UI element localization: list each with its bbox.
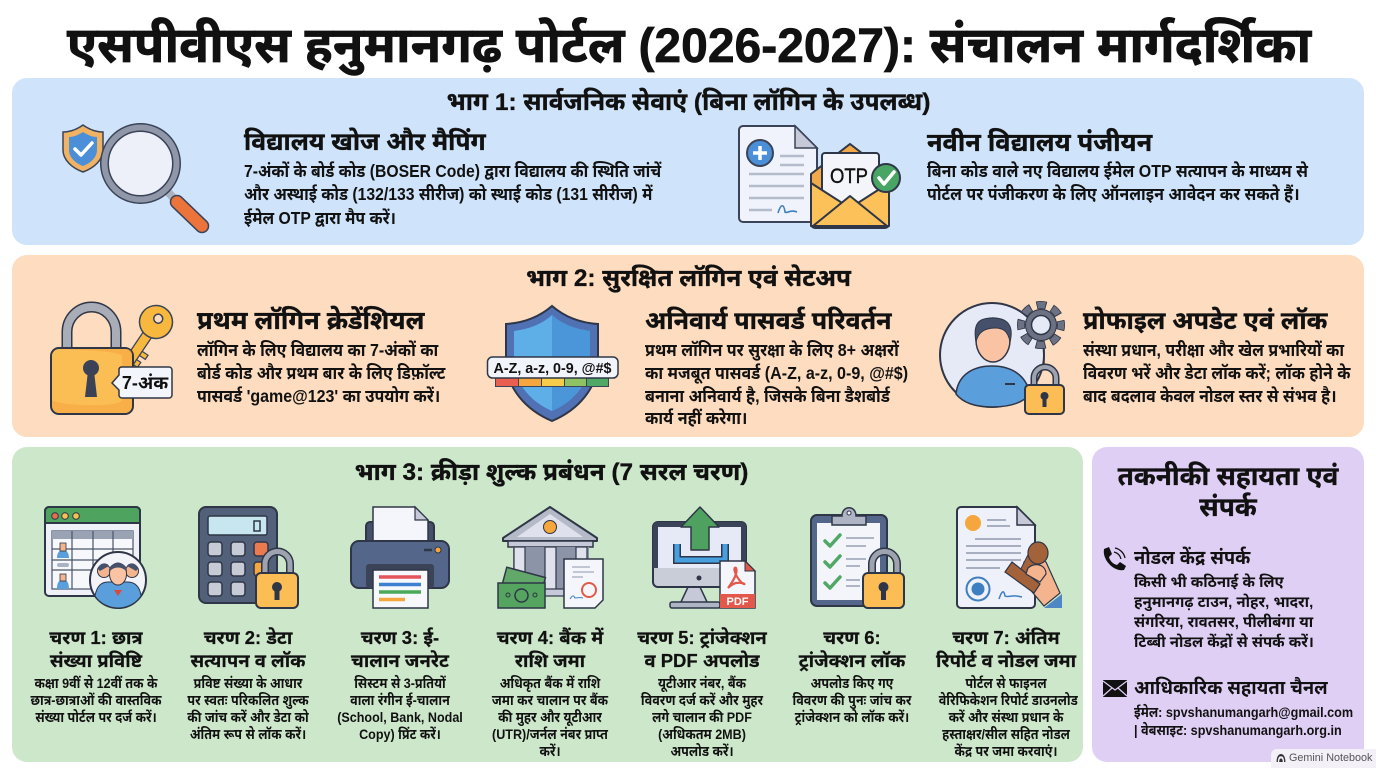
heading: part 1: भाग 1: सार्वजनिक सेवाएं (बिना लॉगिन के उपलब्ध) xyxy=(447,89,930,116)
body text: ईमेल OTP द्वारा मैप करें। xyxy=(244,208,396,228)
icon: step 6 clipboard and lock xyxy=(810,507,905,609)
step description: लगे चालान की PDF xyxy=(652,708,752,724)
subheading: प्रथम लॉगिन क्रेडेंशियल xyxy=(197,307,424,335)
icon: user profile with gear and lock xyxy=(939,301,1065,415)
body text: बनाना अनिवार्य है, जिसके बिना डैशबोर्ड xyxy=(645,386,890,406)
step description: अंतिम रूप से लॉक करें। xyxy=(190,726,306,742)
step title xyxy=(190,627,306,671)
step title: चरण 7: अंतिम xyxy=(952,627,1060,648)
icon: envelope xyxy=(1103,680,1127,697)
step description: वाला रंगीन ई-चालान xyxy=(350,692,450,708)
body text: और अस्थाई कोड (132/133 सीरीज) को स्थाई कोड (131 सीरीज) में xyxy=(244,184,652,204)
text: step 7 xyxy=(931,626,1081,760)
step description xyxy=(939,674,1073,760)
text: official support channel xyxy=(1134,675,1376,739)
step description: करें और संस्था प्रधान के xyxy=(949,708,1063,724)
icon: notebook logo xyxy=(1276,754,1286,762)
text: school search and mapping xyxy=(244,127,662,228)
body text: बिना कोड वाले नए विद्यालय ईमेल OTP सत्यापन के माध्यम से xyxy=(927,161,1308,181)
step title: व PDF अपलोड xyxy=(644,650,760,671)
step description: अपलोड करें। xyxy=(670,742,734,758)
step description xyxy=(640,674,764,758)
icon: step 1 student table xyxy=(44,506,147,609)
text: step 4 xyxy=(492,627,608,758)
step description xyxy=(337,674,463,742)
watermark: Gemini Notebook xyxy=(1271,749,1376,768)
panel: part 2 secure login xyxy=(12,255,1364,437)
step description xyxy=(792,674,912,726)
heading: part 3: भाग 3: क्रीड़ा शुल्क प्रबंधन (7 सरल चरण) xyxy=(355,459,748,486)
step title xyxy=(350,627,450,671)
icon: phone xyxy=(1103,547,1128,571)
step title: चरण 1: छात्र xyxy=(49,627,143,648)
step title xyxy=(798,627,906,672)
step title xyxy=(931,626,1081,672)
icon: step 7 signed document and stamp xyxy=(957,507,1059,608)
heading: support: तकनीकी सहायता एवं xyxy=(1118,461,1338,491)
step description xyxy=(187,674,309,742)
step description: अधिकृत बैंक में राशि xyxy=(500,674,600,690)
icon: step 4 bank, cash and receipt xyxy=(497,506,604,609)
panel: part 1 public services xyxy=(12,78,1364,245)
step description: छात्र-छात्राओं की वास्तविक xyxy=(30,692,162,708)
step title xyxy=(496,627,604,671)
text: step 1 xyxy=(30,627,162,724)
step title: चरण 5: ट्रांजेक्शन xyxy=(637,627,767,648)
text: step 5 xyxy=(637,627,768,758)
body text: कार्य नहीं करेगा। xyxy=(645,408,747,428)
body text xyxy=(1083,340,1351,406)
panel: technical support and contact xyxy=(1092,447,1364,762)
step title xyxy=(49,627,143,671)
text: step 3 xyxy=(337,627,463,742)
heading: support xyxy=(1092,461,1364,523)
body text: लॉगिन के लिए विद्यालय का 7-अंकों का xyxy=(197,340,438,360)
body text: किसी भी कठिनाई के लिए xyxy=(1134,574,1284,591)
body text: संस्था प्रधान, परीक्षा और खेल प्रभारियों का xyxy=(1083,340,1344,360)
step description: पर स्वतः परिकलित शुल्क xyxy=(187,692,309,708)
step description: की मुहर और यूटीआर xyxy=(498,708,602,724)
body text xyxy=(645,340,908,428)
icon: step 5 monitor upload and PDF xyxy=(652,506,756,609)
icon: password shield with strength bar xyxy=(486,304,619,422)
body text: विवरण भरें और डेटा लॉक करें; लॉक होने के xyxy=(1083,363,1350,383)
step title: चरण 2: डेटा xyxy=(204,627,292,648)
step description xyxy=(30,674,162,724)
step description: Copy) प्रिंट करें। xyxy=(359,726,441,742)
title: एसपीवीएस हनुमानगढ़ पोर्टल (2026-2027): संचालन मार्गदर्शिका xyxy=(67,17,1311,73)
panel: part 3 sports fee management xyxy=(12,447,1083,762)
step description: कक्षा 9वीं से 12वीं तक के xyxy=(35,674,157,690)
text: first login credentials xyxy=(196,306,446,406)
body text: बोर्ड कोड और प्रथम बार के लिए डिफ़ॉल्ट xyxy=(197,363,445,383)
step description: विवरण की पुनः जांच कर xyxy=(793,692,911,708)
icon: padlock, key and 7-digit tag xyxy=(50,302,174,415)
step description: प्रविष्ट संख्या के आधार xyxy=(194,674,302,690)
step title: संख्या प्रविष्टि xyxy=(50,650,142,671)
body text: बाद बदलाव केवल नोडल स्तर से संभव है। xyxy=(1083,386,1337,406)
body text xyxy=(197,340,446,406)
step title: चरण 4: बैंक में xyxy=(497,627,603,648)
text: nodal centre contact xyxy=(1134,545,1314,653)
step title: ट्रांजेक्शन लॉक xyxy=(799,650,905,671)
body text: का मजबूत पासवर्ड (A-Z, a-z, 0-9, @#$) xyxy=(645,363,908,383)
body text xyxy=(244,161,662,228)
step description: यूटीआर नंबर, बैंक xyxy=(658,674,746,690)
icon: step 5 monitor upload and PDF: PDF xyxy=(726,596,749,608)
step description: संख्या पोर्टल पर दर्ज करें। xyxy=(35,708,157,724)
body text: प्रथम लॉगिन पर सुरक्षा के लिए 8+ अक्षरों xyxy=(645,340,899,360)
step title: सत्यापन व लॉक xyxy=(190,650,306,671)
body text: | वेबसाइट: spvshanumangarh.org.in xyxy=(1134,722,1342,738)
body text: हनुमानगढ़ टाउन, नोहर, भादरा, xyxy=(1134,594,1313,611)
step description: जमा कर चालान पर बैंक xyxy=(492,692,608,708)
step description: ट्रांजेक्शन को लॉक करें। xyxy=(795,708,909,724)
step title: राशि जमा xyxy=(515,650,585,671)
step title xyxy=(637,627,768,671)
subheading: आधिकारिक सहायता चैनल xyxy=(1134,677,1328,699)
step title: चरण 3: ई- xyxy=(361,627,439,648)
text: step 6 xyxy=(792,627,912,726)
step description: केंद्र पर जमा करवाएं। xyxy=(955,742,1057,758)
icon: step 2 calculator and lock xyxy=(198,506,299,609)
subheading: अनिवार्य पासवर्ड परिवर्तन xyxy=(645,307,892,335)
body text xyxy=(927,161,1308,204)
step description: सिस्टम से 3-प्रतियों xyxy=(354,674,446,690)
body text: ईमेल: spvshanumangarh@gmail.com xyxy=(1134,704,1353,720)
body text xyxy=(1134,573,1314,653)
subheading: प्रोफाइल अपडेट एवं लॉक xyxy=(1083,307,1327,335)
body text: पोर्टल पर पंजीकरण के लिए ऑनलाइन आवेदन कर सकते हैं। xyxy=(927,184,1300,204)
step title: चरण 6: xyxy=(823,627,881,648)
icon: password shield with strength bar: A-Z, a-z, 0-9, @#$ xyxy=(494,360,612,377)
step description: हस्ताक्षर/सील सहित नोडल xyxy=(942,726,1070,742)
text: profile update and lock xyxy=(1082,306,1351,406)
body text: टिब्बी नोडल केंद्रों से संपर्क करें। xyxy=(1134,634,1314,651)
heading: support: संपर्क xyxy=(1199,492,1257,522)
step description: (अधिकतम 2MB) xyxy=(658,726,746,742)
step description: करें। xyxy=(539,742,561,758)
step title: चालान जनरेट xyxy=(351,650,449,671)
body text: 7-अंकों के बोर्ड कोड (BOSER Code) द्वारा विद्यालय की स्थिति जांचें xyxy=(244,161,661,181)
body text xyxy=(1134,703,1353,739)
step description: अपलोड किए गए xyxy=(811,674,893,690)
text: new school registration xyxy=(926,128,1308,204)
subheading: नवीन विद्यालय पंजीयन xyxy=(927,129,1152,157)
icon: padlock, key and 7-digit tag: 7-अंक xyxy=(122,373,169,393)
icon: step 3 printer xyxy=(350,506,450,609)
step description: (UTR)/जर्नल नंबर प्राप्त xyxy=(492,726,608,742)
body text: संगरिया, रावतसर, पीलीबंगा या xyxy=(1134,614,1313,631)
text: step 2 xyxy=(187,627,309,742)
subheading: विद्यालय खोज और मैपिंग xyxy=(244,129,486,156)
step description: (School, Bank, Nodal xyxy=(337,708,463,724)
watermark: Gemini Notebook: Gemini Notebook xyxy=(1289,752,1372,764)
icon: document and OTP envelope: OTP xyxy=(830,165,868,188)
step description: पोर्टल से फाइनल xyxy=(965,674,1047,690)
text: mandatory password change xyxy=(645,306,908,428)
body text: पासवर्ड 'game@123' का उपयोग करें। xyxy=(197,386,440,406)
step title: रिपोर्ट व नोडल जमा xyxy=(936,650,1076,671)
step description: वेरिफिकेशन रिपोर्ट डाउनलोड xyxy=(939,692,1078,708)
step description xyxy=(492,674,608,758)
heading: part 2: भाग 2: सुरक्षित लॉगिन एवं सेटअप xyxy=(526,265,851,292)
icon: document and OTP envelope xyxy=(738,124,901,229)
step description: की जांच करें और डेटा को xyxy=(187,708,309,724)
icon: shield and magnifying glass xyxy=(62,123,210,234)
step description: विवरण दर्ज करें और मुहर xyxy=(641,692,763,708)
subheading: नोडल केंद्र संपर्क xyxy=(1134,547,1250,569)
